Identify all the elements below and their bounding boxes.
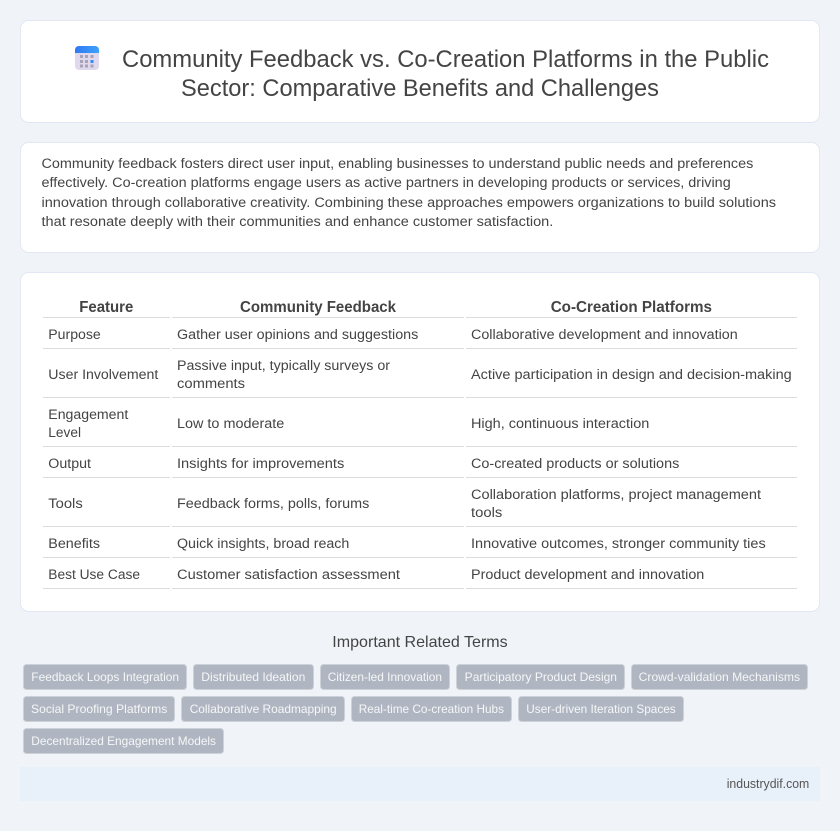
row: tools: Tools: [48, 496, 83, 512]
row: purpose: Purpose: [48, 327, 101, 343]
row: tools: [48, 487, 761, 521]
tag: Social Proofing Platforms: [31, 702, 167, 716]
row: best use case: Customer satisfaction assessment: [177, 567, 400, 583]
panel: comparison table: [20, 272, 820, 612]
tag: [24, 728, 224, 754]
row: user involvement: Active participation in design and decision-making: [471, 367, 792, 383]
footer bar: [20, 767, 820, 801]
row: user involvement: Passive input, typically surveys or: [177, 358, 390, 374]
row: engagement level: Low to moderate: [177, 416, 284, 432]
row: user involvement: User Involvement: [48, 367, 158, 383]
table header row: [79, 299, 712, 316]
tag: [24, 696, 174, 722]
row: engagement level: High, continuous interaction: [471, 416, 649, 432]
tag: [194, 664, 314, 690]
table header row: Co-Creation Platforms: [551, 299, 712, 316]
row: engagement level: Engagement: [48, 407, 128, 423]
footer bar: industrydif.com: [727, 777, 809, 791]
row: best use case: Product development and innovation: [471, 567, 704, 583]
tag: [456, 664, 624, 690]
row: best use case: [48, 567, 704, 583]
text block: introduction paragraph: effectively. Co-creation platforms engage users as active partners in developing products or services, driving: [42, 175, 731, 191]
tag: User-driven Iteration Spaces: [526, 702, 676, 716]
row: best use case: Best Use Case: [48, 567, 140, 583]
text block: introduction paragraph: [42, 156, 776, 230]
tag: [352, 696, 512, 722]
title: Community Feedback vs. Co-Creation Platforms in the Public: [122, 46, 769, 73]
tag: Feedback Loops Integration: [31, 670, 179, 684]
tag: [632, 664, 808, 690]
row: purpose: Gather user opinions and suggestions: [177, 327, 418, 343]
row: output: Co-created products or solutions: [471, 456, 679, 472]
text block: introduction paragraph: Community feedback fosters direct user input, enabling businesses to understand public needs and preferences: [42, 156, 753, 172]
row: benefits: Innovative outcomes, stronger community ties: [471, 536, 766, 552]
row: benefits: Benefits: [48, 536, 100, 552]
panel: header: [20, 20, 820, 122]
row: tools: Feedback forms, polls, forums: [177, 496, 369, 512]
tag: Real-time Co-creation Hubs: [359, 702, 504, 716]
tag: [24, 664, 186, 690]
tag: Decentralized Engagement Models: [31, 734, 216, 748]
table header row: Community Feedback: [240, 299, 396, 316]
tag: Participatory Product Design: [465, 670, 617, 684]
panel: introduction: [20, 142, 820, 252]
row: tools: Collaboration platforms, project management: [471, 487, 761, 503]
row: output: Insights for improvements: [177, 456, 344, 472]
title: Sector: Comparative Benefits and Challenges: [181, 75, 659, 102]
row: engagement level: Level: [48, 425, 81, 441]
row: benefits: Quick insights, broad reach: [177, 536, 349, 552]
row: engagement level: [48, 407, 649, 441]
row: output: Output: [48, 456, 91, 472]
row: tools: tools: [471, 505, 502, 521]
tag: Collaborative Roadmapping: [190, 702, 337, 716]
tag: Citizen-led Innovation: [328, 670, 442, 684]
tag: Crowd-validation Mechanisms: [639, 670, 800, 684]
row: purpose: Collaborative development and innovation: [471, 327, 738, 343]
tag list: related terms: [24, 664, 808, 754]
row: purpose: [48, 327, 738, 343]
tag: [518, 696, 684, 722]
table header row: Feature: [79, 299, 133, 316]
text block: introduction paragraph: that resonate deeply with their communities and enhance customer satisfaction.: [42, 214, 553, 230]
tag: Distributed Ideation: [201, 670, 305, 684]
tag: [182, 696, 344, 722]
icon: calendar: [75, 46, 99, 70]
heading: important related terms: Important Related Terms: [332, 634, 508, 651]
tag: [320, 664, 450, 690]
row: user involvement: comments: [177, 376, 245, 392]
row: benefits: [48, 536, 766, 552]
title: [122, 46, 769, 102]
row: user involvement: [48, 358, 792, 392]
text block: introduction paragraph: innovation through collaborative creativity. Combining these approaches empowers organizations to build solutions: [42, 195, 776, 211]
row: output: [48, 456, 679, 472]
